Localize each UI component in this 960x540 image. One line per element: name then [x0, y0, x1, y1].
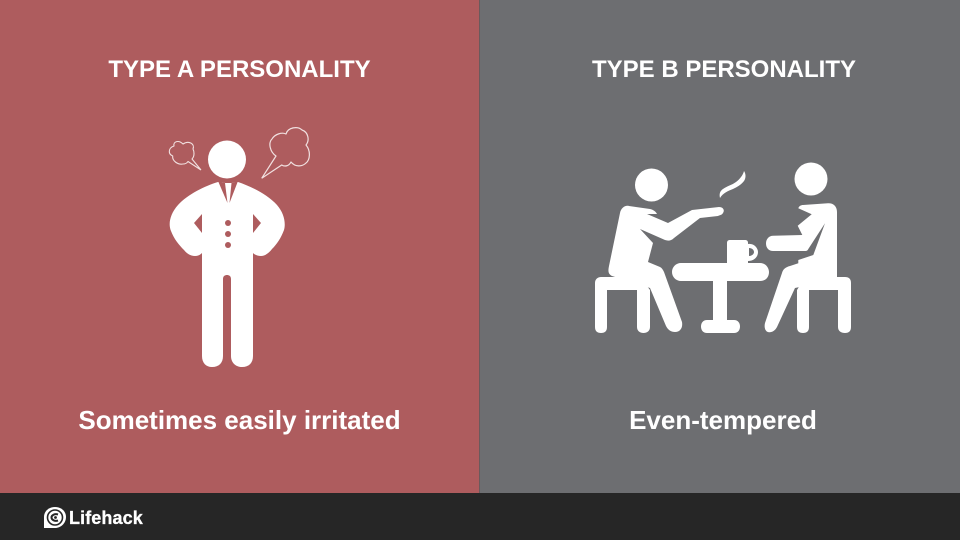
icon: irritated man	[168, 127, 310, 367]
head	[208, 140, 246, 178]
right stool	[797, 277, 851, 333]
smoke puff right	[262, 128, 309, 178]
caption: type A: Sometimes easily irritated	[78, 405, 401, 435]
left person	[608, 168, 724, 332]
steam	[720, 171, 746, 198]
smoke puff left	[169, 142, 201, 170]
logo mark	[44, 507, 66, 528]
body	[170, 182, 285, 367]
logo wordmark: Lifehack	[69, 508, 143, 528]
right person	[765, 162, 837, 332]
panel: type B	[480, 0, 960, 493]
table	[672, 263, 769, 333]
coffee cup	[727, 240, 758, 263]
left stool	[595, 277, 650, 333]
heading: type A: TYPE A PERSONALITY	[108, 56, 371, 83]
caption: type B: Even-tempered	[629, 405, 817, 435]
panel: type A	[0, 0, 480, 493]
arm gaps, collar and buttons	[194, 181, 261, 248]
heading: type B: TYPE B PERSONALITY	[592, 56, 856, 83]
footer bar	[0, 493, 960, 540]
